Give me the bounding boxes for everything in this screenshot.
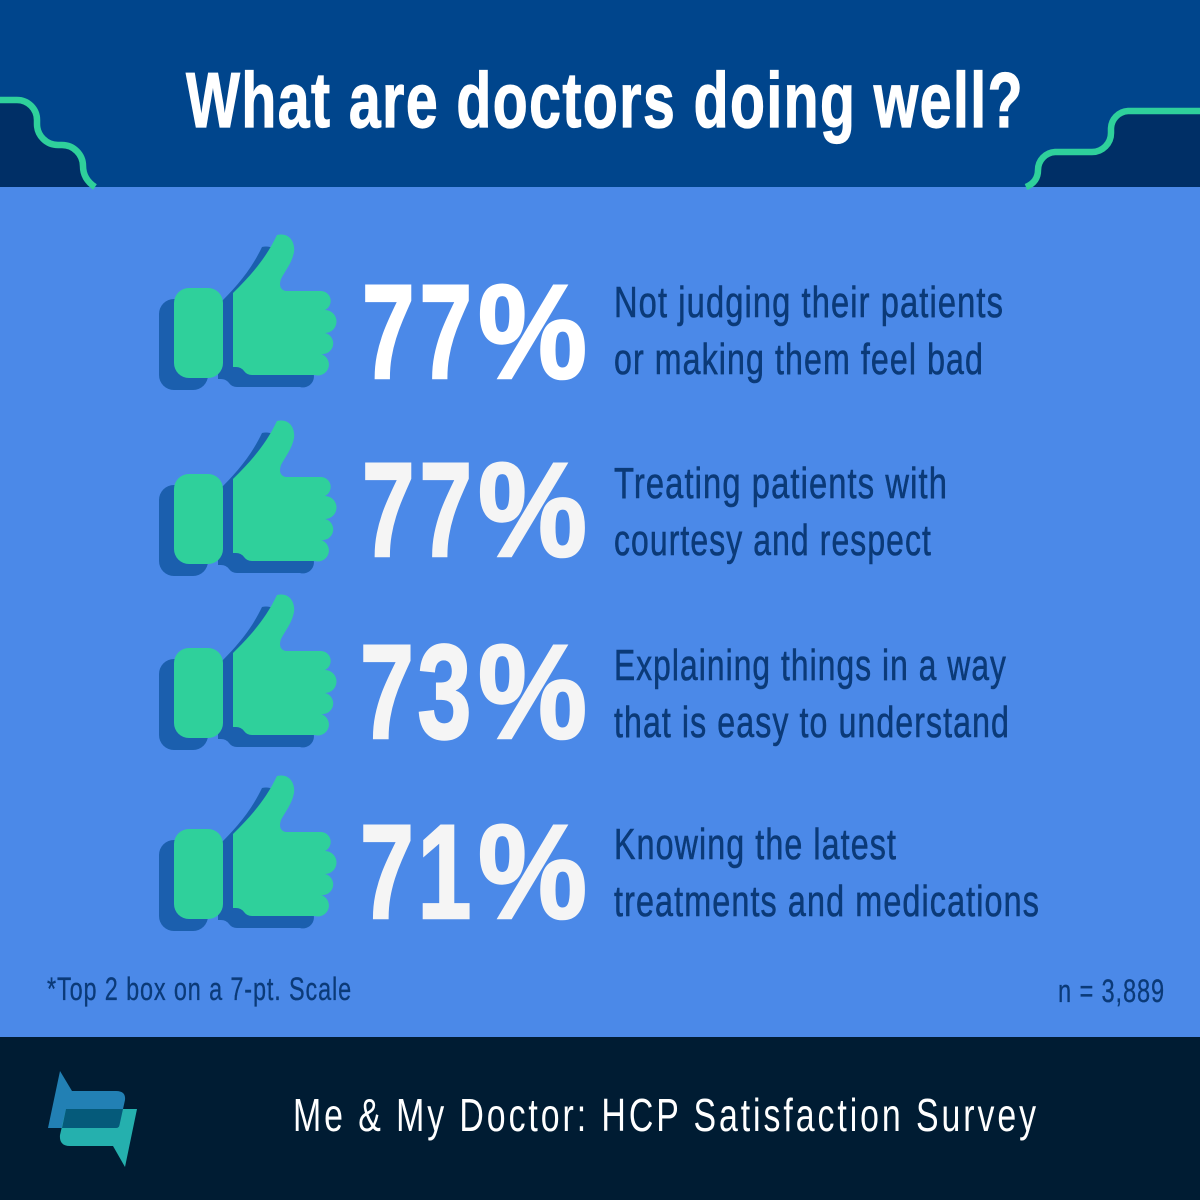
description: courtesy and respect [614, 516, 932, 565]
row 4 [159, 776, 1040, 947]
description: Not judging their patients [614, 278, 1004, 327]
percentage: 77%: % [478, 258, 587, 407]
icon: thumbs up [159, 594, 336, 750]
description: Knowing the latest [614, 820, 897, 869]
description [614, 459, 948, 565]
description: Explaining things in a way [614, 641, 1007, 690]
footer band [0, 1037, 1200, 1200]
percentage: 77%: % [478, 436, 587, 585]
icon: thumbs up [159, 776, 336, 931]
percentage: 71%: 71 [360, 798, 475, 947]
description [614, 278, 1004, 384]
footnote: scale: *Top 2 box on a 7-pt. Scale [47, 971, 352, 1007]
icon: thumbs up [159, 234, 336, 390]
row 3 [159, 594, 1010, 767]
description [614, 820, 1040, 926]
header band [0, 0, 1200, 187]
percentage: 77%: 77 [362, 258, 477, 407]
row 1 [159, 234, 1004, 407]
percentage: 77%: 77 [362, 436, 477, 585]
icon: thumbs up [159, 420, 336, 576]
percentage: 73%: 73 [360, 618, 475, 767]
sample size: n = 3,889 [1058, 973, 1165, 1009]
description: or making them feel bad [614, 335, 984, 384]
wave corner: left [0, 100, 95, 187]
description: treatments and medications [614, 877, 1040, 926]
description: Treating patients with [614, 459, 948, 508]
percentage: 73%: % [478, 618, 587, 767]
description [614, 641, 1010, 747]
percentage: 71%: % [478, 798, 587, 947]
icon: speech bubbles logo [48, 1071, 137, 1167]
description: that is easy to understand [614, 698, 1010, 747]
wave corner: right [1026, 111, 1200, 187]
row 2 [159, 420, 948, 585]
